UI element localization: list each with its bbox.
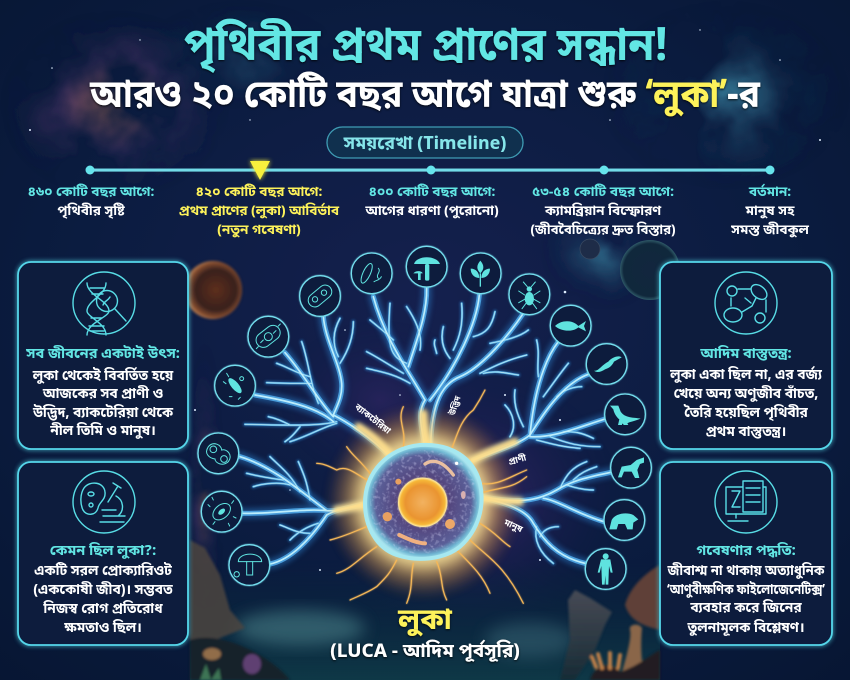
timeline entry: 420 <box>179 183 340 240</box>
body text <box>32 366 174 441</box>
body text: লুকা একা ছিল না, এর বর্জ্য <box>669 365 823 385</box>
LUCA name: লুকা <box>397 602 453 641</box>
heading: গবেষণার পদ্ধতি: <box>696 542 796 561</box>
timeline entry: 53-54: (জীববৈচিত্র্যের দ্রুত বিস্তার) <box>530 221 676 240</box>
icon: microbes network <box>715 272 777 334</box>
body text: (এককোষী জীব)। সম্ভবত <box>33 581 173 600</box>
icon: plant <box>471 261 490 287</box>
icon: human <box>598 553 613 585</box>
timeline entry: present: মানুষ সহ <box>745 203 795 221</box>
body text: খেয়ে অন্য অণুজীব বাঁচত, <box>674 384 818 404</box>
icon: reptile <box>594 356 622 372</box>
icon: DNA and magnifier <box>73 272 135 335</box>
icon: dinosaur <box>610 406 641 425</box>
timeline entry: present: সমস্ত জীবকুল <box>730 221 810 240</box>
icon: fish <box>555 321 586 331</box>
planets <box>184 239 680 319</box>
timeline pill heading: সময়রেখা (Timeline) <box>343 134 506 157</box>
branches <box>240 288 611 564</box>
icon: bacterium <box>223 373 244 399</box>
timeline entry: 53-54: ৫৩-৫৪ কোটি বছর আগে: <box>532 183 674 202</box>
body text: একটি সরল প্রোক্যারিওট <box>34 562 172 581</box>
branch label: bacteria: ব্যাকটেরিয়া <box>351 400 394 438</box>
heading: সব জীবনের একটাই উৎস: <box>25 345 180 364</box>
heading: কেমন ছিল লুকা?: <box>50 542 156 561</box>
timeline entry: 460: পৃথিবীর সৃষ্টি <box>57 202 125 221</box>
body text: ব্যবহার করে জিনের <box>689 599 802 618</box>
icon: capsule bacterium <box>253 322 283 350</box>
cell: LUCA <box>365 445 482 559</box>
timeline axis <box>86 166 774 174</box>
icon: cell and microscope <box>73 471 135 533</box>
panel: research method <box>660 462 832 645</box>
tree of life diagram <box>198 246 651 603</box>
title: পৃথিবীর প্রথম প্রাণের সন্ধান! <box>184 18 668 79</box>
body text: নিজস্ব রোগ প্রতিরোধ <box>42 600 163 619</box>
panel: one origin <box>18 262 188 449</box>
timeline entry: 420: ৪২০ কোটি বছর আগে: <box>196 183 323 202</box>
icon: bacillus <box>305 282 334 310</box>
icon: computer and DNA data <box>715 471 777 533</box>
timeline pill heading <box>327 127 523 158</box>
node icons <box>198 246 651 589</box>
icon: fungi <box>234 554 262 577</box>
icon: dog <box>618 457 644 478</box>
body text: তৈরি হয়েছিল পৃথিবীর <box>683 404 809 423</box>
timeline marker: yellow triangle <box>250 161 270 180</box>
landscape <box>190 540 660 680</box>
body text: আজকের সব প্রাণী ও <box>42 385 164 404</box>
timeline entry: present: বর্তমান: <box>748 182 791 202</box>
icon: eukaryote cell <box>207 444 230 464</box>
icon: bear <box>609 513 638 529</box>
heading: আদিম বাস্তুতন্ত্র: <box>699 345 792 364</box>
body text: ক্ষমতাও ছিল। <box>63 619 142 638</box>
timeline entry: 460: ৪৬০ কোটি বছর আগে: <box>28 183 155 202</box>
body text <box>33 562 173 638</box>
body text: প্রথম বাস্তুতন্ত্র। <box>706 423 786 442</box>
body text: জীবাশ্ম না থাকায় অত্যাধুনিক <box>667 562 825 581</box>
timeline entry: 53-54: ক্যামব্রিয়ান বিস্ফোরণ <box>544 202 662 221</box>
panel: what LUCA was like <box>18 462 188 645</box>
branch label: plants: উদ্ভিদ <box>448 395 464 418</box>
branch label: humans: মানুষ <box>501 517 525 536</box>
body text: তুলনামূলক বিশ্লেষণ। <box>687 619 804 638</box>
cell glow and tendrils <box>317 390 527 603</box>
LUCA subtitle: (LUCA - আদিম পূর্বসূরি) <box>330 639 520 665</box>
timeline entry: 400: ৪০০ কোটি বছর আগে: <box>369 183 496 202</box>
timeline entry: 460 <box>28 183 155 221</box>
panel: primitive ecosystem <box>660 262 832 449</box>
timeline entry: 400: আগের ধারণা (পুরোনো) <box>364 203 499 221</box>
body text <box>667 562 825 638</box>
timeline entry: 420: (নতুন গবেষণা) <box>217 222 301 240</box>
body text: নীল তিমি ও মানুষ। <box>49 422 156 441</box>
icon: virus-like microbe <box>208 497 236 526</box>
timeline entry: 420: প্রথম প্রাণের (লুকা) আবির্ভাব <box>179 201 340 221</box>
timeline entry: 53-54 <box>530 183 676 240</box>
icon: insect <box>519 282 540 309</box>
subtitle: আরও ২০ কোটি বছর আগে যাত্রা শুরু ‘লুকা’-র <box>89 71 760 123</box>
body text: ‘আণুবীক্ষণিক ফাইলোজেনেটিক্স’ <box>667 581 825 600</box>
icon: mushroom <box>413 257 440 281</box>
body text: লুকা থেকেই বিবর্তিত হয়ে <box>32 366 174 386</box>
branch label: animals: প্রাণী <box>507 451 528 469</box>
body text: উদ্ভিদ, ব্যাকটেরিয়া থেকে <box>32 404 174 423</box>
icon: protists <box>359 262 381 285</box>
timeline entry: present <box>730 182 810 240</box>
timeline entry: 400 <box>364 183 499 221</box>
body text <box>669 365 823 442</box>
